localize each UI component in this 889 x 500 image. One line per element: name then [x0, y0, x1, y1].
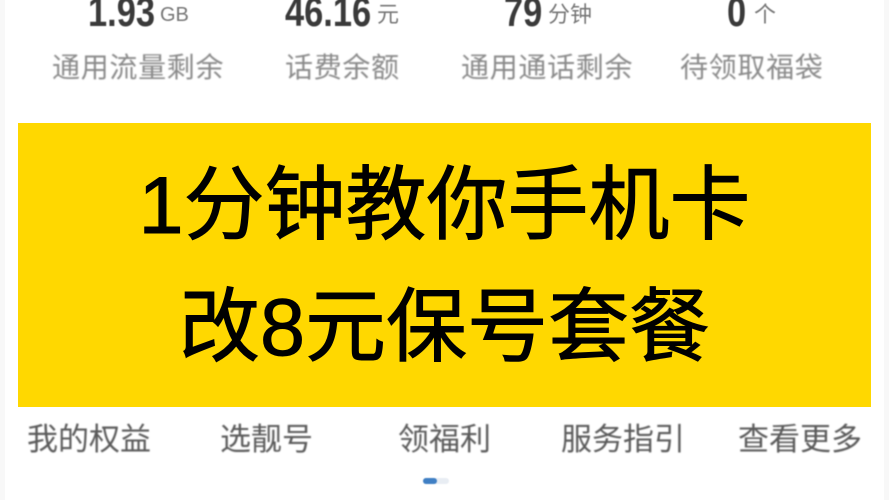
stat: lucky bags: 待领取福袋 — [680, 52, 824, 83]
stat: data remaining — [52, 0, 224, 83]
edge strip: right — [884, 0, 889, 500]
stat: call minutes — [461, 0, 633, 83]
tab: see more: 查看更多 — [738, 422, 862, 457]
stat: data remaining: 通用流量剩余 — [52, 52, 224, 83]
stat: balance: 话费余额 — [285, 52, 400, 83]
tab: get benefits: 领福利 — [398, 422, 491, 457]
stat: balance — [284, 0, 400, 83]
yellow banner — [18, 123, 871, 407]
title: line 2: 改8元保号套餐 — [179, 283, 710, 373]
scroll indicator — [423, 478, 449, 484]
edge strip: left — [0, 0, 5, 500]
stat: call minutes: 通用通话剩余 — [461, 52, 633, 83]
stat: data remaining: GB — [160, 4, 189, 26]
stat: balance: 元 — [377, 2, 399, 27]
tab: my benefits: 我的权益 — [27, 422, 151, 457]
stat: lucky bags: 个 — [754, 2, 776, 27]
stat: call minutes: 分钟 — [548, 2, 592, 27]
stat: lucky bags — [680, 0, 824, 83]
tab: service guide: 服务指引 — [561, 422, 685, 457]
title: line 1: 1分钟教你手机卡 — [138, 161, 751, 251]
tab: choose number: 选靓号 — [220, 422, 313, 457]
